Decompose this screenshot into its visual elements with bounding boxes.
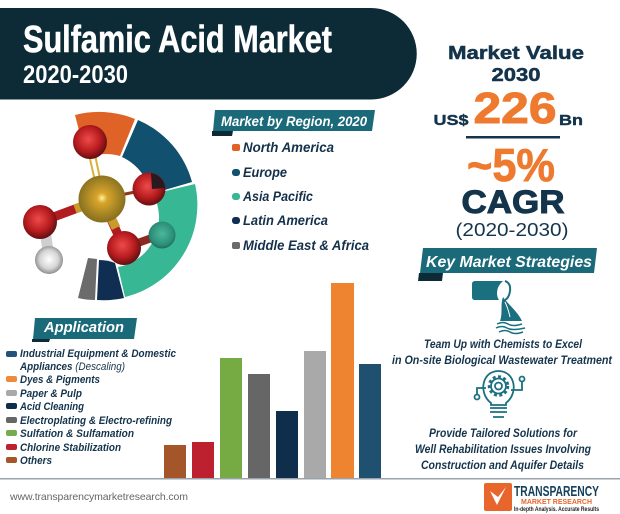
heading: key market strategies: Key Market Strategies (426, 254, 592, 271)
logo: transparency market research: In-depth Analysis. Accurate Results (514, 507, 600, 513)
legend: electroplating: Electroplating & Electro-refining (20, 415, 172, 427)
slice: Latin America (97, 260, 124, 300)
icon: wastewater pipe (472, 281, 525, 334)
application legend (6, 348, 176, 467)
region legend (232, 140, 369, 253)
value number: 226 (474, 84, 556, 133)
legend: Europe: Europe (243, 165, 287, 180)
legend: acid cleaning: Acid Cleaning (19, 401, 84, 413)
heading: market by region (212, 110, 375, 136)
market value label: Market Value (448, 43, 584, 63)
molecule illustration (23, 125, 176, 274)
website url: www.transparencymarketresearch.com (9, 491, 188, 503)
logo: transparency market research: MARKET RESEARCH (521, 497, 592, 506)
slice: Middle East & Africa (78, 258, 97, 300)
legend: industrial equipment: Appliances (Descaling) (19, 361, 125, 373)
value currency: US$ (434, 112, 469, 129)
donut chart: market by region (75, 112, 197, 300)
legend: industrial equipment (6, 348, 176, 373)
slice: Asia Pacific (118, 184, 197, 297)
bar chart: application (164, 283, 381, 478)
legend: paper and pulp: Paper & Pulp (20, 388, 82, 400)
title banner (0, 8, 417, 100)
strategy 2 text: Provide Tailored Solutions for (429, 426, 578, 440)
strategy 2 text: Well Rehabilitation Issues Involving (415, 442, 592, 456)
strategy 1 text (392, 337, 613, 367)
logo: transparency market research (484, 483, 600, 513)
icon: lightbulb with gear (474, 371, 524, 417)
divider (466, 136, 560, 138)
subtitle years: 2020-2030 (23, 61, 128, 89)
legend: North America: North America (243, 140, 334, 155)
heading: key market strategies (418, 248, 597, 281)
title: Sulfamic Acid Market (23, 19, 332, 61)
heading: market by region: Market by Region, 2020 (221, 114, 367, 129)
CAGR period: (2020-2030) (456, 219, 568, 240)
market value year: 2030 (492, 65, 540, 85)
strategy 2 text (415, 426, 592, 472)
heading: application: Application (43, 319, 124, 336)
legend: industrial equipment: Industrial Equipment & Domestic (20, 348, 176, 360)
value unit: Bn (559, 112, 583, 129)
legend: dyes and pigments: Dyes & Pigments (20, 374, 100, 386)
legend: Middle East & Africa: Middle East & Africa (243, 238, 369, 253)
legend: sulfation: Sulfation & Sulfamation (20, 428, 134, 440)
legend: Asia Pacific: Asia Pacific (242, 189, 313, 204)
legend: others: Others (20, 455, 52, 467)
slice: North America (75, 112, 135, 158)
market value block (434, 43, 584, 240)
CAGR percent: ~5% (467, 139, 555, 191)
legend: others (6, 455, 52, 467)
legend: chlorine stabilization: Chlorine Stabilization (20, 442, 121, 454)
strategy 2 text: Construction and Aquifer Details (421, 458, 584, 472)
legend: Latin America: Latin America (243, 213, 328, 228)
strategy 1 text: Team Up with Chemists to Excel (424, 337, 583, 351)
heading: application (32, 318, 137, 342)
slice: Europe (122, 120, 192, 194)
CAGR label: CAGR (462, 184, 564, 220)
